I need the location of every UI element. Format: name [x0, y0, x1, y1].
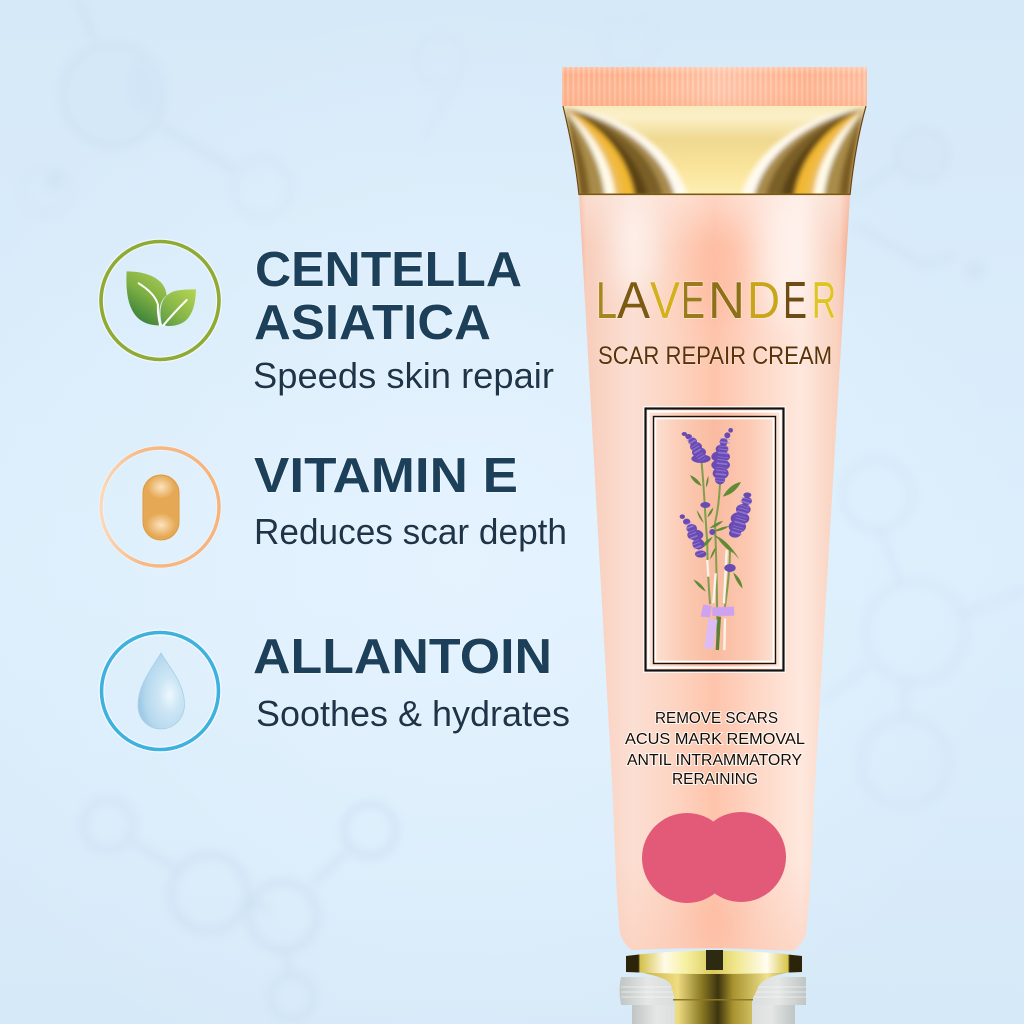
- claims list: [625, 710, 805, 788]
- brand name: lavender: R: [812, 272, 836, 330]
- molecule: bottom left: [83, 800, 396, 1019]
- heading line two: ASIATICA: [254, 296, 491, 350]
- heading: VITAMIN E: [254, 449, 518, 503]
- ingredient: allantoin: [102, 630, 570, 750]
- framed botanical illustration: [644, 407, 785, 672]
- claims list: ANTIL INTRAMMATORY: [627, 752, 802, 769]
- ingredient: vitamin e: [101, 448, 567, 566]
- description: Reduces scar depth: [254, 511, 567, 552]
- description: Speeds skin repair: [253, 355, 554, 396]
- stand: gold neck: [640, 972, 790, 1024]
- molecule: faint top centre: [416, 16, 656, 150]
- cap: [562, 67, 867, 106]
- gold shoulder: [563, 106, 866, 197]
- molecule: lower right: [825, 460, 1024, 806]
- brand name: lavender: E: [783, 272, 807, 330]
- icon: capsule: [101, 448, 219, 566]
- claims list: ACUS MARK REMOVAL: [625, 731, 805, 748]
- stand: gold collar: [626, 950, 802, 974]
- brand name: lavender: N: [708, 272, 745, 330]
- pink blobs: [642, 812, 786, 903]
- brand name: lavender: E: [681, 272, 705, 330]
- molecule: top left: [22, 0, 291, 217]
- brand name: lavender: [596, 272, 836, 330]
- brand name: lavender: V: [650, 272, 680, 330]
- description: Soothes & hydrates: [256, 693, 570, 734]
- icon: leaves: [101, 242, 219, 360]
- stand: glass base: [620, 977, 806, 1024]
- subtitle: SCAR REPAIR CREAM: [598, 342, 832, 370]
- icon: water drop: [102, 632, 218, 750]
- ingredient: centella asiatica: [101, 242, 554, 396]
- product: tube: [562, 67, 867, 1024]
- heading: ALLANTOIN: [253, 630, 552, 684]
- brand name: lavender: A: [617, 272, 650, 330]
- brand name: lavender: L: [596, 272, 617, 330]
- icon: lavender bouquet: [680, 428, 752, 650]
- claims list: RERAINING: [672, 771, 758, 788]
- brand name: lavender: D: [747, 272, 780, 330]
- heading: CENTELLA: [255, 243, 522, 297]
- molecule: upper right: [852, 130, 984, 279]
- claims list: REMOVE SCARS: [655, 710, 778, 727]
- tube body: [579, 195, 850, 955]
